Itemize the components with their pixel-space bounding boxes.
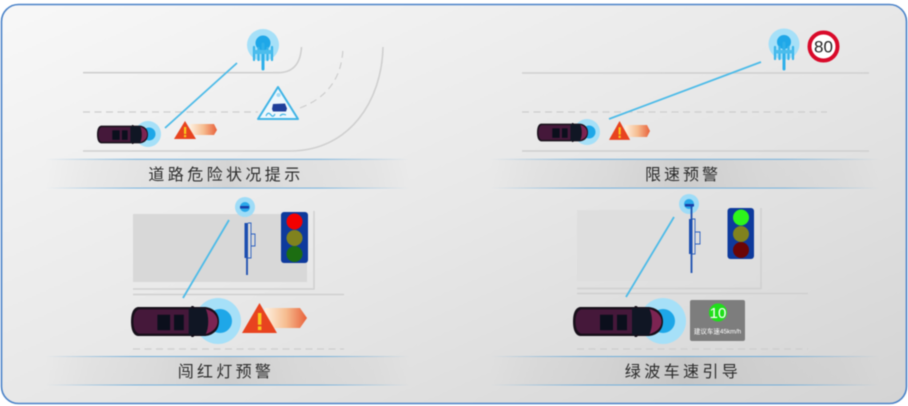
icon: roadside unit tower [247,29,279,69]
icon: signal pole with unit [679,194,700,273]
caption: road hazard: 道路危险状况提示 [148,166,304,184]
caption band [490,356,880,386]
signal link line [183,220,229,298]
icon: traffic light red [281,212,308,263]
panel: road hazard warning [45,29,410,189]
icon: traffic light green [728,208,754,259]
icon: car with signal [573,298,686,344]
icon: roadside unit tower [768,28,800,69]
icon: warning triangle with arrow [174,121,217,139]
speed guidance panel: 建议车速45km/h [694,326,742,336]
icon: car with signal [131,298,241,344]
icon: signal pole with unit [235,197,255,275]
caption: speed limit: 限速预警 [645,166,721,184]
caption: red light: 闯红灯预警 [178,363,274,381]
icon: car with signal [97,121,161,147]
icon: speed limit 80 sign [810,32,838,60]
icon: slippery road warning sign [258,87,298,119]
caption: green wave: 绿波车速引导 [625,363,741,381]
signal link line [609,62,761,119]
speed guidance panel: 10 [710,305,726,322]
signal link line [165,63,237,128]
speed guidance panel [690,300,745,341]
panel: speed limit warning [490,28,880,189]
intersection block and road [577,208,808,349]
panel: red light warning [45,197,410,386]
road lines [522,73,869,151]
icon: car with signal [537,119,600,145]
caption band [45,159,410,189]
panel: green wave speed guidance [490,194,880,386]
caption band [45,356,410,386]
road lines curving [83,47,383,151]
icon: warning triangle with arrow [609,121,650,140]
caption band [490,159,880,189]
icon: warning triangle with arrow [242,303,307,333]
intersection block and road [133,211,344,349]
signal link line [626,217,674,297]
icon: speed limit 80 sign: 80 [814,38,833,56]
